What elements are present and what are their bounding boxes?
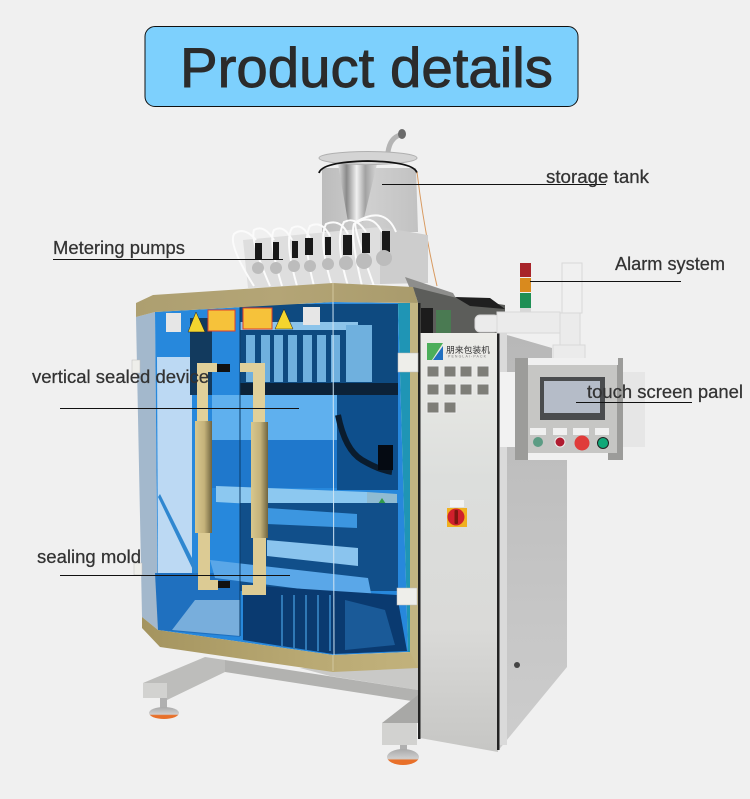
lower film lanes bbox=[243, 585, 407, 654]
title banner: Product details bbox=[180, 36, 553, 99]
forming block bbox=[337, 395, 398, 490]
company logo: 朋来包装机 bbox=[446, 344, 490, 355]
lower plates bbox=[240, 503, 398, 591]
main power switch bbox=[447, 500, 467, 527]
machine base frame bbox=[143, 657, 419, 765]
warning labels bbox=[166, 307, 320, 332]
label: storage tank: storage tank bbox=[546, 167, 650, 187]
door hinges bbox=[132, 353, 418, 605]
stainless steel cabinet front bbox=[418, 303, 500, 752]
title banner bbox=[145, 26, 578, 106]
company logo bbox=[427, 343, 490, 360]
storage tank bbox=[319, 129, 437, 286]
label: touch screen panel: touch screen panel bbox=[587, 382, 743, 402]
label: sealing mold: sealing mold bbox=[37, 547, 141, 567]
cabinet door bbox=[136, 302, 408, 655]
label: alarm system: Alarm system bbox=[615, 254, 725, 274]
upper pump rails behind glass bbox=[190, 304, 398, 395]
label: vertical sealed device: vertical sealed device bbox=[32, 367, 209, 387]
signal tower light bbox=[520, 263, 531, 314]
panel support arm bbox=[475, 263, 585, 359]
company logo: PENGLAI-PACK bbox=[448, 354, 487, 358]
stainless steel cabinet side bbox=[497, 333, 567, 752]
metering pumps bbox=[233, 215, 428, 288]
rear machine top and cable bbox=[405, 277, 505, 333]
touch screen panel bbox=[500, 358, 645, 460]
sealing bar bbox=[216, 486, 367, 510]
door handles bbox=[195, 363, 268, 595]
label: metering pumps: Metering pumps bbox=[53, 238, 185, 258]
teal strip and gold frame bbox=[136, 283, 418, 672]
temperature controllers bbox=[427, 366, 489, 413]
